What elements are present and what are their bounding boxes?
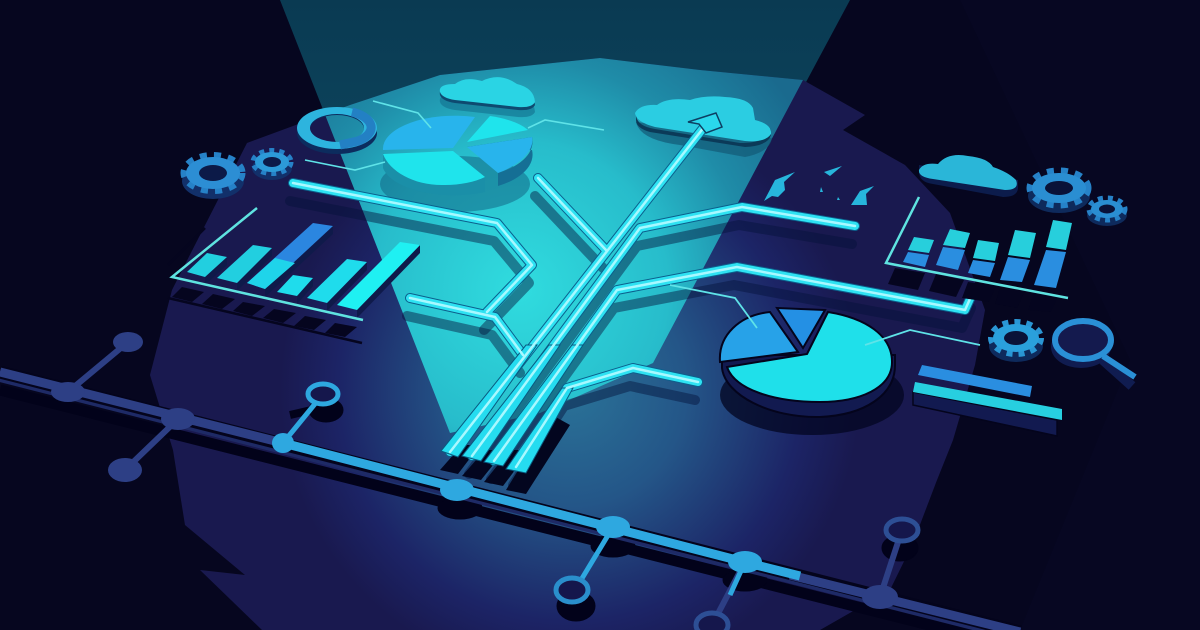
timeline extrusion (0, 378, 1020, 630)
circuit lines (293, 122, 974, 473)
gear hole (1004, 331, 1028, 345)
big gear base (182, 163, 244, 199)
lens ring (1055, 321, 1111, 359)
pie slice cyan lower (383, 151, 485, 185)
tapered feet (441, 345, 583, 473)
line highlight (293, 122, 974, 467)
big gear hole (199, 165, 227, 181)
line glow (293, 122, 974, 467)
pie shadow (720, 355, 904, 435)
gear teeth (991, 322, 1041, 354)
top-left pie chart (305, 101, 604, 212)
small gear base (1087, 204, 1127, 226)
bar sides (205, 226, 420, 318)
lens base (1051, 326, 1111, 368)
light beam on platform (326, 58, 803, 433)
donut base (297, 112, 377, 154)
timeline lit nodes (272, 433, 762, 573)
pie leader lines (305, 101, 604, 170)
arrow head (688, 113, 722, 133)
light beam upper (280, 0, 850, 433)
gear body (993, 324, 1039, 352)
cloud shadow (636, 122, 772, 157)
bars shadow (888, 268, 1058, 312)
big gear base (1028, 179, 1090, 213)
small gear teeth (1089, 198, 1125, 220)
small gear teeth (253, 150, 291, 174)
gear base (989, 330, 1043, 362)
small gear body (1091, 200, 1123, 218)
floor ticks (172, 287, 357, 337)
cloud body (919, 155, 1017, 190)
pie blue slice (720, 312, 798, 362)
donut chart (297, 107, 377, 154)
donut ring (297, 107, 377, 149)
chart axes (172, 208, 363, 320)
timeline outline (0, 372, 1020, 630)
left bar chart (168, 208, 420, 343)
floor line (168, 228, 362, 343)
timeline shadow (0, 390, 1020, 630)
line fill (293, 122, 974, 467)
small gear body (255, 152, 289, 172)
pie large slice (727, 312, 892, 402)
pie leader lines (670, 285, 980, 345)
timeline dim nodes (51, 332, 898, 609)
big gear body (186, 157, 240, 189)
cloud top left (440, 77, 535, 117)
foot shadows (440, 415, 570, 494)
gears left (182, 150, 292, 199)
gears right (1028, 171, 1127, 226)
blue bar (918, 365, 1032, 397)
chart axes (886, 197, 1068, 298)
dark side panel (850, 0, 1200, 630)
magnifying glass (1051, 321, 1135, 386)
fragments upper right (764, 166, 874, 205)
timeline dim segments (0, 342, 1020, 630)
cloud extrusion (636, 114, 771, 147)
big gear hole (1045, 181, 1073, 195)
big gear body (1032, 173, 1086, 203)
cloud extrusion (919, 165, 1018, 197)
cloud body (635, 96, 771, 141)
cyan bar (913, 382, 1062, 420)
pie slice cyan upper (467, 116, 528, 142)
bars (187, 253, 227, 277)
cloud right (919, 155, 1018, 197)
right bar chart (886, 197, 1072, 312)
pie shadow (380, 156, 530, 212)
cloud shadow (440, 87, 535, 117)
pie slice blue right (467, 137, 532, 173)
small gear hole (263, 157, 281, 167)
cloud with arrow (635, 96, 772, 157)
bars extrusion (913, 392, 1057, 436)
stacked bars (908, 237, 934, 253)
timeline circuit (0, 332, 1020, 630)
cloud body (440, 77, 535, 107)
handle base (1103, 360, 1132, 386)
big gear teeth (1030, 171, 1088, 205)
timeline rings (308, 384, 918, 630)
handle (1103, 356, 1135, 377)
central platform (150, 58, 985, 630)
small gear lower right (989, 322, 1043, 362)
cloud extrusion (440, 80, 535, 110)
horizontal bars (913, 365, 1062, 436)
timeline lit segment (283, 443, 800, 576)
main pie chart (670, 285, 980, 435)
pie slice blue (383, 116, 475, 150)
small gear base (252, 156, 292, 180)
pie extrusion (722, 355, 895, 417)
donut segment (340, 112, 371, 145)
pie small slice (777, 308, 825, 348)
small gear hole (1099, 204, 1115, 214)
pie extrusion (383, 153, 485, 195)
circuit line shadows (290, 196, 971, 485)
big gear teeth (184, 156, 242, 190)
